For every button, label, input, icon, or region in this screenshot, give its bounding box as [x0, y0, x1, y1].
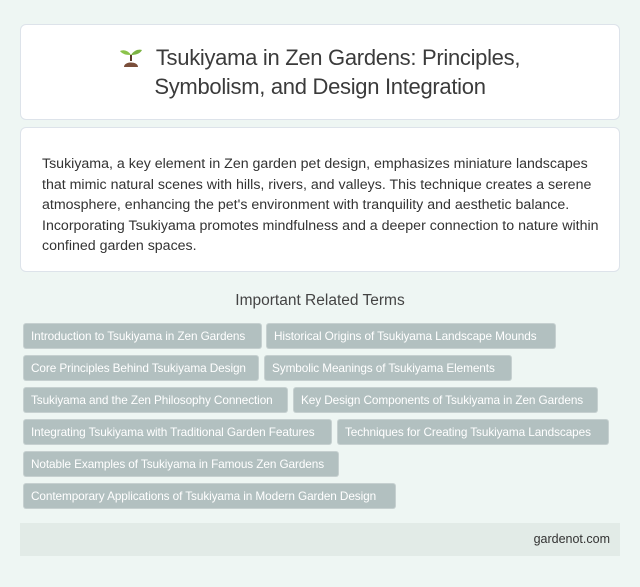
- title: Symbolism, and Design Integration: [154, 74, 486, 99]
- tag: Contemporary Applications of Tsukiyama in Modern Garden Design: [31, 489, 376, 503]
- tag: Integrating Tsukiyama with Traditional Garden Features: [31, 425, 315, 439]
- description text: Tsukiyama, a key element in Zen garden pet design, emphasizes miniature landscapes that mimic natural scenes with hills, rivers, and valleys. This technique creates a serene atmosphere, enhancing the pet's environment with tranquility and aesthetic balance. Incorporating Tsukiyama promotes mindfulness and a deeper connection to nature within confined garden spaces.: [42, 156, 599, 254]
- tag: [265, 356, 511, 380]
- footer: [20, 523, 620, 556]
- tag: Historical Origins of Tsukiyama Landscape Mounds: [274, 329, 537, 343]
- tag: Notable Examples of Tsukiyama in Famous Zen Gardens: [31, 457, 324, 471]
- tag: [24, 388, 287, 412]
- footer credit: gardenot.com: [534, 532, 610, 546]
- tag: [24, 484, 395, 508]
- tag: Key Design Components of Tsukiyama in Zen Gardens: [301, 393, 583, 407]
- icon: seedling: [120, 50, 142, 67]
- tag: [267, 324, 555, 348]
- title: [120, 45, 520, 99]
- tag: [24, 452, 338, 476]
- tag: [294, 388, 597, 412]
- tag: Tsukiyama and the Zen Philosophy Connection: [31, 393, 273, 407]
- tag: [24, 356, 258, 380]
- description panel: [20, 127, 620, 272]
- section heading: Important Related Terms: [235, 292, 405, 309]
- title panel: [20, 24, 620, 120]
- tag: [338, 420, 608, 444]
- title: Tsukiyama in Zen Gardens: Principles,: [156, 45, 520, 70]
- tag: Introduction to Tsukiyama in Zen Gardens: [31, 329, 245, 343]
- tag: Symbolic Meanings of Tsukiyama Elements: [272, 361, 495, 375]
- tag: Techniques for Creating Tsukiyama Landscapes: [345, 425, 591, 439]
- tag: [24, 324, 261, 348]
- tag: [24, 420, 331, 444]
- tag: Core Principles Behind Tsukiyama Design: [31, 361, 246, 375]
